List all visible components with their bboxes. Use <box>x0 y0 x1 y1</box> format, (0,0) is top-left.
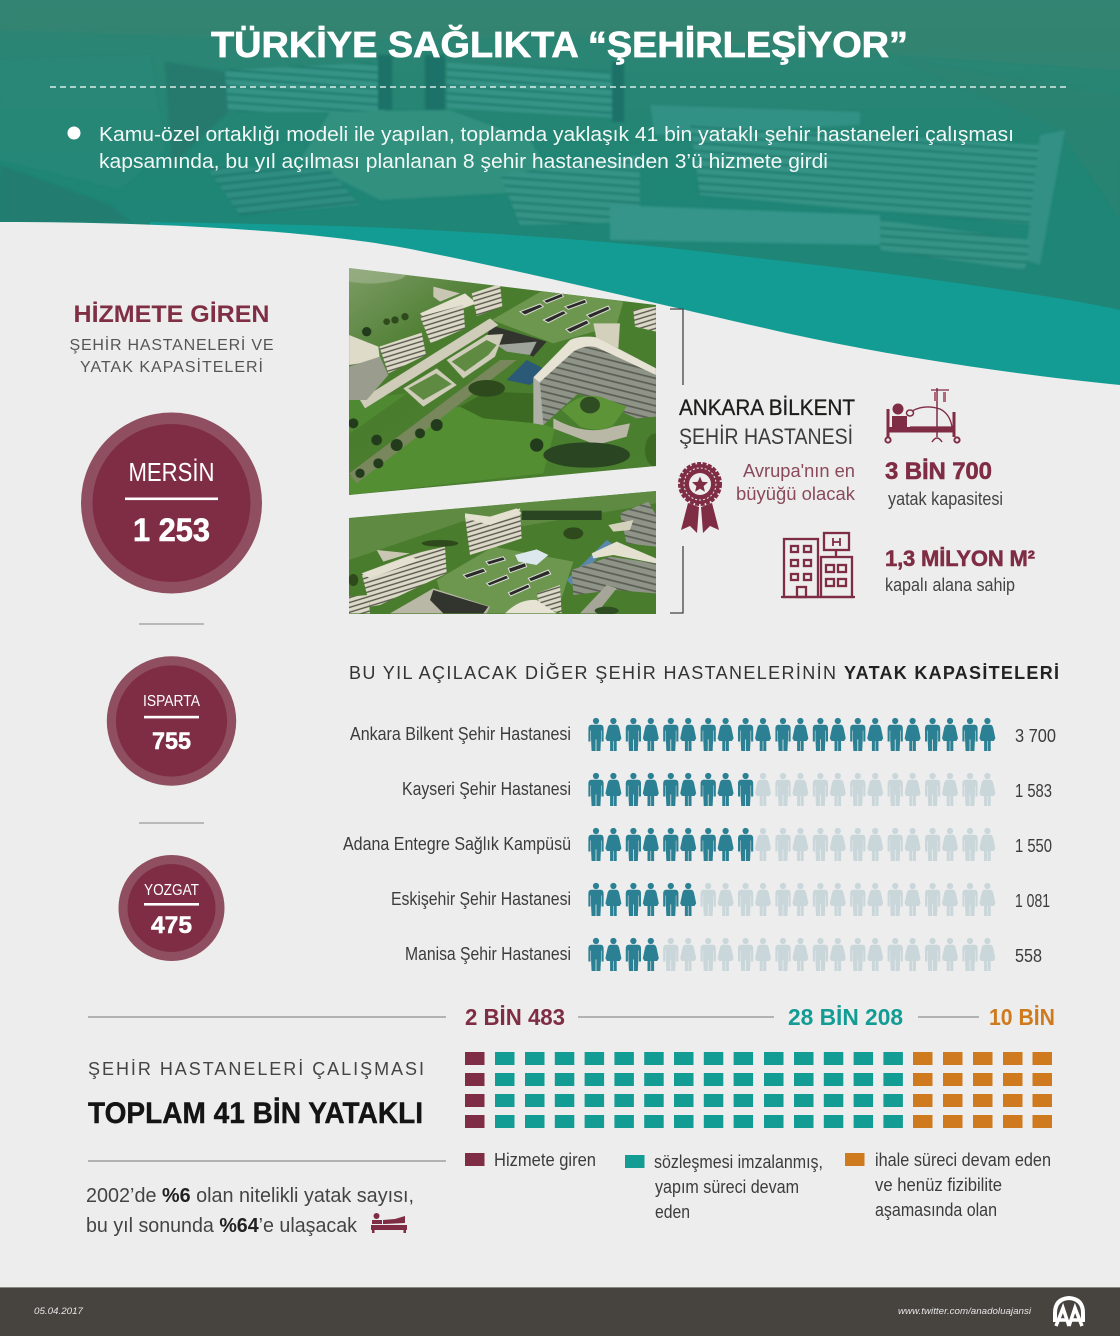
row: Eskişehir: Eskişehir Şehir Hastanesi <box>391 889 571 909</box>
footer: www.twitter.com/anadoluajansi <box>898 1306 1032 1316</box>
stat: closed area: 1,3 MİLYON M² <box>885 546 1035 571</box>
intro text: Kamu-özel ortaklığı modeli ile yapılan, toplamda yaklaşık 41 bin yataklı şehir hastaneleri çalışması <box>99 124 1014 146</box>
circle: Yozgat <box>118 855 224 961</box>
legend: tender ongoing: ve henüz fizibilite <box>875 1175 1002 1195</box>
circle: Isparta <box>107 656 236 786</box>
content background wave <box>0 222 1120 1288</box>
stat: closed area: kapalı alana sahip <box>885 575 1015 595</box>
section heading: hizmete giren: HİZMETE GİREN <box>74 301 270 328</box>
intro text: kapsamında, bu yıl açılması planlanan 8 şehir hastanesinden 3’ü hizmete girdi <box>99 151 828 173</box>
row: Adana: Adana Entegre Sağlık Kampüsü <box>343 834 571 854</box>
row: Manisa: Manisa Şehir Hastanesi <box>405 944 571 964</box>
stat: closed area <box>885 546 1035 595</box>
bracket <box>670 309 683 613</box>
footer <box>0 1287 1120 1336</box>
circle: Mersin: 1 253 <box>133 512 210 548</box>
row: Kayseri: 1 583 <box>1015 781 1052 801</box>
note: qualified beds: bu yıl sonunda %64’e ulaşacak <box>86 1215 358 1237</box>
circle: Isparta: 755 <box>152 728 191 755</box>
row: Manisa: 558 <box>1015 946 1042 966</box>
pictogram chart: bed capacity by hospital <box>343 718 1056 971</box>
chart heading: BU YIL AÇILACAK DİĞER ŞEHİR HASTANELERİNİN <box>349 662 836 683</box>
stat: bed capacity: 3 BİN 700 <box>885 458 992 485</box>
row: Eskişehir <box>391 883 1050 916</box>
chart heading: YATAK KAPASİTELERİ <box>844 663 1059 683</box>
header photo background <box>0 0 1120 400</box>
circle: Yozgat: 475 <box>151 912 192 939</box>
title: TÜRKİYE SAĞLIKTA “ŞEHİRLEŞİYOR” <box>211 24 908 65</box>
text: largest in Europe <box>736 461 856 504</box>
totals row: 28 BİN 208 <box>788 1004 903 1030</box>
stat: bed capacity: yatak kapasitesi <box>888 489 1003 509</box>
icon: hospital building <box>781 533 855 597</box>
footer: 05.04.2017 <box>34 1306 84 1316</box>
text: largest in Europe: Avrupa'nın en <box>743 461 855 481</box>
section heading: hizmete giren <box>70 301 274 376</box>
row: Manisa <box>405 938 1042 971</box>
row: Kayseri: Kayseri Şehir Hastanesi <box>402 779 571 799</box>
note: qualified beds <box>86 1185 414 1237</box>
section heading: hizmete giren: ŞEHİR HASTANELERİ VE <box>70 335 274 354</box>
intro text <box>68 124 1014 173</box>
total panel text <box>88 1017 446 1161</box>
icon: rosette award <box>680 464 720 533</box>
circle: Mersin: MERSİN <box>128 457 214 487</box>
heading: Ankara Bilkent: ANKARA BİLKENT <box>679 395 855 420</box>
legend: under construction <box>625 1152 823 1222</box>
legend: tender ongoing: ihale süreci devam eden <box>875 1150 1051 1170</box>
row: Adana <box>343 828 1052 861</box>
totals row: 10 BİN <box>989 1004 1055 1030</box>
legend: under construction: eden <box>655 1202 690 1222</box>
legend: tender ongoing <box>845 1150 1051 1220</box>
chart heading <box>349 662 1059 683</box>
dashed divider <box>50 86 1070 88</box>
photo: hospital aerial view 1 <box>333 263 665 495</box>
legend: under construction: yapım süreci devam <box>655 1177 799 1197</box>
heading: Ankara Bilkent: ŞEHİR HASTANESİ <box>679 424 853 449</box>
row: Ankara Bilkent: Ankara Bilkent Şehir Hastanesi <box>350 724 571 744</box>
row: Eskişehir: 1 081 <box>1015 891 1050 911</box>
legend: in service: Hizmete giren <box>494 1150 596 1170</box>
totals row <box>465 1004 1055 1030</box>
circle: Yozgat: YOZGAT <box>144 882 199 899</box>
row: Ankara Bilkent <box>350 718 1056 751</box>
row: Ankara Bilkent: 3 700 <box>1015 726 1056 746</box>
stat: bed capacity <box>885 458 1003 509</box>
divider <box>139 822 204 824</box>
decorative teal wave <box>150 222 1120 400</box>
text: largest in Europe: büyüğü olacak <box>736 484 856 504</box>
icon: bed <box>371 1213 407 1233</box>
legend: under construction: sözleşmesi imzalanmış, <box>654 1152 823 1172</box>
row: Kayseri <box>402 773 1052 806</box>
total panel text: TOPLAM 41 BİN YATAKLI <box>88 1097 423 1130</box>
icon: hospital bed with drip <box>885 388 960 443</box>
divider <box>139 623 204 625</box>
section heading: hizmete giren: YATAK KAPASİTELERİ <box>80 357 263 376</box>
photo: hospital aerial view 2 <box>348 491 656 615</box>
heading: Ankara Bilkent <box>679 395 855 449</box>
circle: Mersin <box>81 412 262 594</box>
totals row: 2 BİN 483 <box>465 1004 565 1030</box>
circle: Isparta: ISPARTA <box>143 693 201 710</box>
legend: tender ongoing: aşamasında olan <box>875 1200 997 1220</box>
note: qualified beds: 2002’de %6 olan nitelikli yatak sayısı, <box>86 1185 414 1207</box>
row: Adana: 1 550 <box>1015 836 1052 856</box>
waffle chart <box>465 1052 1052 1128</box>
icon: agency logo <box>1055 1298 1083 1326</box>
total panel text: ŞEHİR HASTANELERİ ÇALIŞMASI <box>88 1059 424 1079</box>
